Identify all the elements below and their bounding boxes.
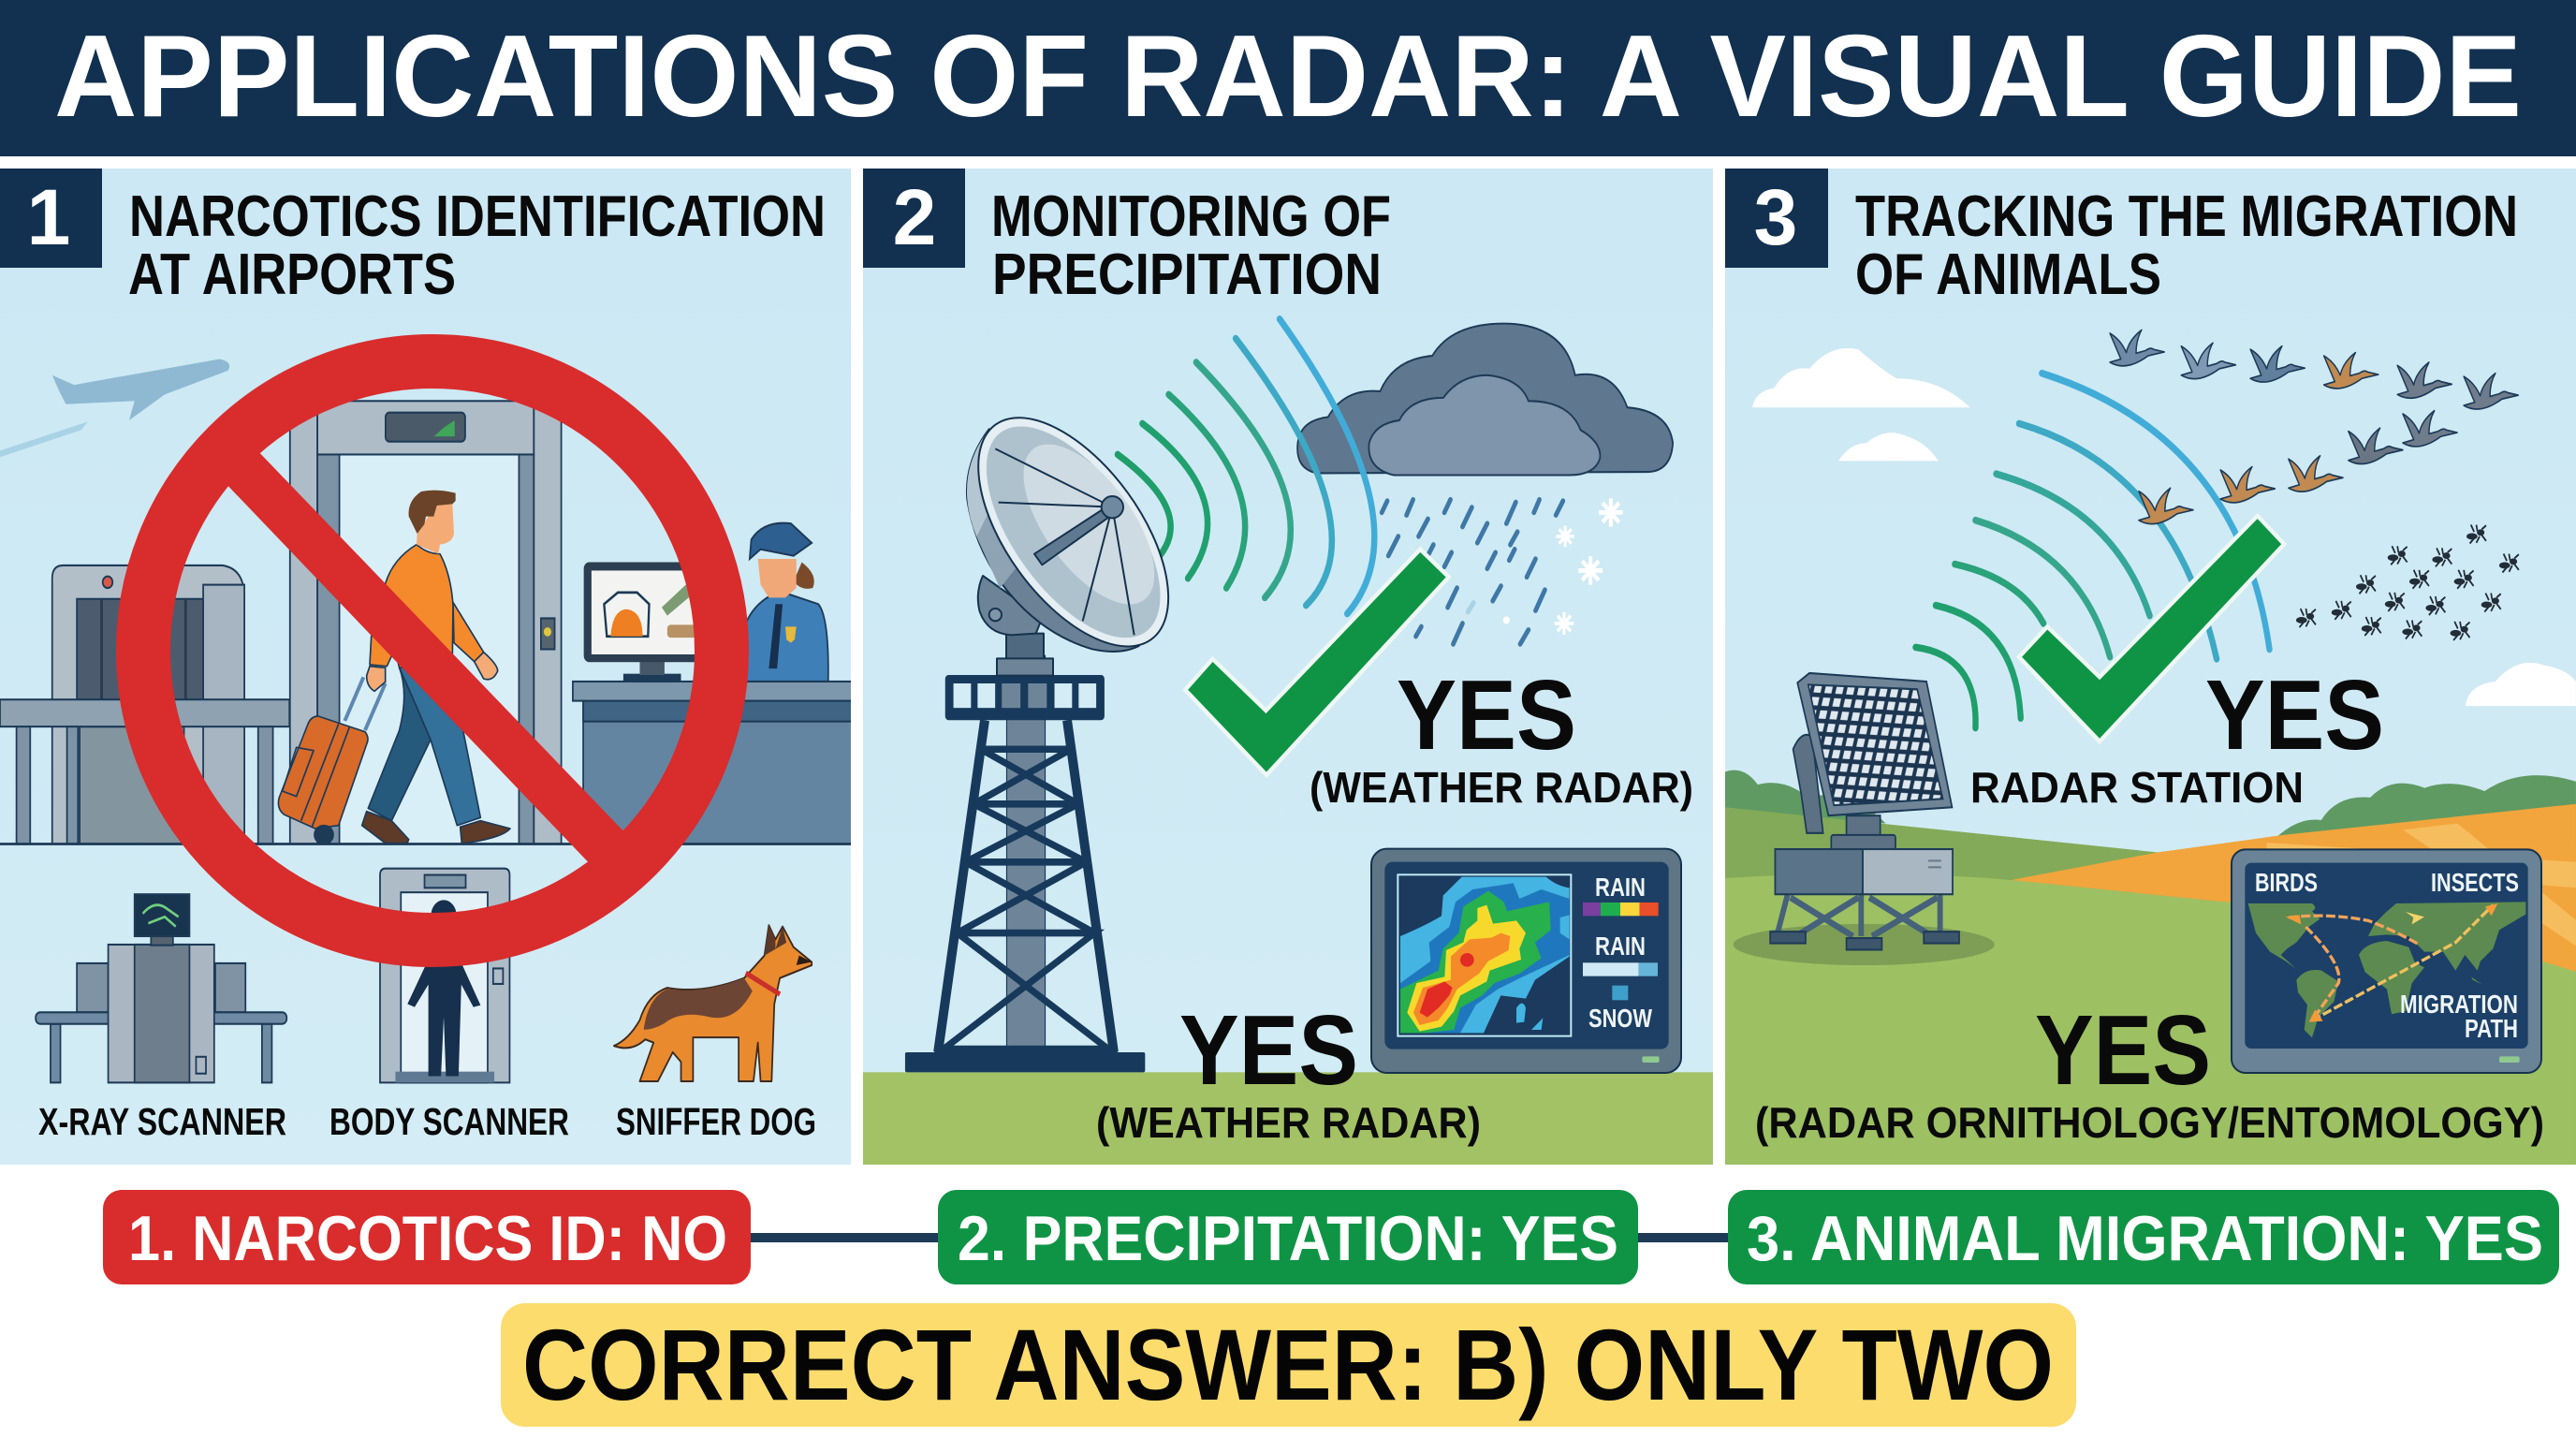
equipment labels: X-RAY SCANNER (38, 1100, 286, 1143)
icon: baggage x-ray machine (0, 565, 289, 844)
display legend labels: RAIN (1595, 932, 1646, 961)
number badge 1: 1 (27, 173, 70, 261)
radar waves (1915, 374, 2270, 728)
icon: snowflakes (1503, 498, 1623, 635)
panel heading 2 (994, 195, 1389, 294)
icon: migration map display (2232, 849, 2541, 1073)
map labels (2255, 868, 2519, 1043)
icon: airplane (0, 360, 229, 457)
weather radar illustration (861, 319, 1718, 1181)
panel: monitoring of precipitation (861, 169, 1718, 1181)
ground (863, 1072, 1713, 1165)
answer text: radar station: YES (2205, 660, 2384, 770)
summary pill: narcotics no: 1. NARCOTICS ID: NO (128, 1203, 727, 1274)
icon: green check mark (1185, 550, 1449, 775)
answer text: radar ornithology: (RADAR ORNITHOLOGY/ENTOMOLOGY) (1755, 1098, 2544, 1147)
equipment labels: BODY SCANNER (329, 1100, 569, 1143)
answer text: lower yes: YES (1179, 995, 1358, 1106)
panel: narcotics identification at airports (0, 169, 853, 1165)
icon: security officer (746, 523, 828, 682)
icon: scanner monitor (584, 562, 695, 681)
icon: x-ray scanner (36, 894, 286, 1082)
icon: radar station (1734, 673, 1995, 965)
radar waves (1118, 319, 1374, 614)
icon: weather radar display (1371, 849, 1681, 1073)
correct answer callout: CORRECT ANSWER: B) ONLY TWO (522, 1308, 2054, 1421)
answer text: lower yes (1098, 1015, 1479, 1146)
icon: radar dish (966, 417, 1170, 676)
title text: APPLICATIONS OF RADAR: A VISUAL GUIDE (54, 12, 2522, 141)
title banner (0, 0, 2576, 156)
number badge 3: 3 (1754, 173, 1797, 261)
icon: rain and snow (1382, 500, 1563, 644)
clouds (1752, 348, 2576, 706)
summary connectors (751, 1233, 1728, 1242)
icon: insect swarm (2296, 525, 2519, 640)
icon: security desk (573, 682, 853, 844)
precipitation heat map (1400, 877, 1570, 1033)
summary pill: narcotics no (103, 1190, 751, 1284)
answer text: upper yes: (WEATHER RADAR) (1310, 763, 1693, 812)
equipment labels: SNIFFER DOG (616, 1100, 816, 1143)
legend colour bars (1583, 902, 1659, 1000)
icon: green check mark (2019, 516, 2284, 741)
number badge 2 (863, 169, 965, 268)
answer text: radar ornithology (1755, 995, 2544, 1147)
number badge 2: 2 (893, 173, 936, 261)
display legend labels: RAIN (1595, 873, 1646, 902)
migration paths (2289, 905, 2493, 1020)
number badge 1 (0, 169, 102, 268)
answer text: radar ornithology: YES (2035, 995, 2211, 1106)
airport scene illustration (0, 360, 853, 1082)
panel heading 1 (129, 195, 822, 294)
answer text: radar station: RADAR STATION (1970, 763, 2304, 812)
answer text: radar station (1970, 660, 2384, 812)
panel heading 1: AT AIRPORTS (128, 242, 456, 307)
panel: tracking the migration of animals (1725, 169, 2576, 1191)
map labels: MIGRATION (2400, 990, 2518, 1019)
map labels: BIRDS (2255, 868, 2318, 897)
icon: body scanner (380, 869, 509, 1082)
equipment labels (38, 1108, 814, 1135)
map labels: INSECTS (2431, 868, 2519, 897)
map labels: PATH (2465, 1014, 2518, 1043)
number badge 3 (1725, 169, 1828, 268)
answer text: lower yes: (WEATHER RADAR) (1096, 1098, 1481, 1147)
display legend labels (1588, 873, 1652, 1033)
world map (2248, 902, 2525, 1037)
panel heading 3 (1855, 184, 2518, 307)
display legend labels: SNOW (1588, 1004, 1652, 1033)
icon: metal detector gate (290, 401, 562, 844)
answer text: upper yes: YES (1397, 660, 1576, 770)
landscape (1725, 770, 2576, 1191)
icon: radar tower (905, 655, 1145, 1072)
summary pill: precipitation yes: 2. PRECIPITATION: YES (958, 1203, 1618, 1274)
panel heading 2: PRECIPITATION (992, 242, 1382, 307)
panel heading 1: NARCOTICS IDENTIFICATION (129, 184, 826, 249)
icon: storm cloud (1297, 324, 1673, 476)
answer text: upper yes (1311, 680, 1691, 811)
icon: sniffer dog (614, 925, 812, 1081)
panel heading 3: OF ANIMALS (1855, 242, 2161, 307)
panel heading 2: MONITORING OF (991, 184, 1391, 249)
icon: bird flock (2110, 330, 2518, 524)
migration illustration (1725, 330, 2576, 1191)
icon: traveller with suitcase (278, 491, 510, 844)
icon: prohibition sign (143, 361, 722, 940)
migration arrowheads (2286, 903, 2497, 1022)
